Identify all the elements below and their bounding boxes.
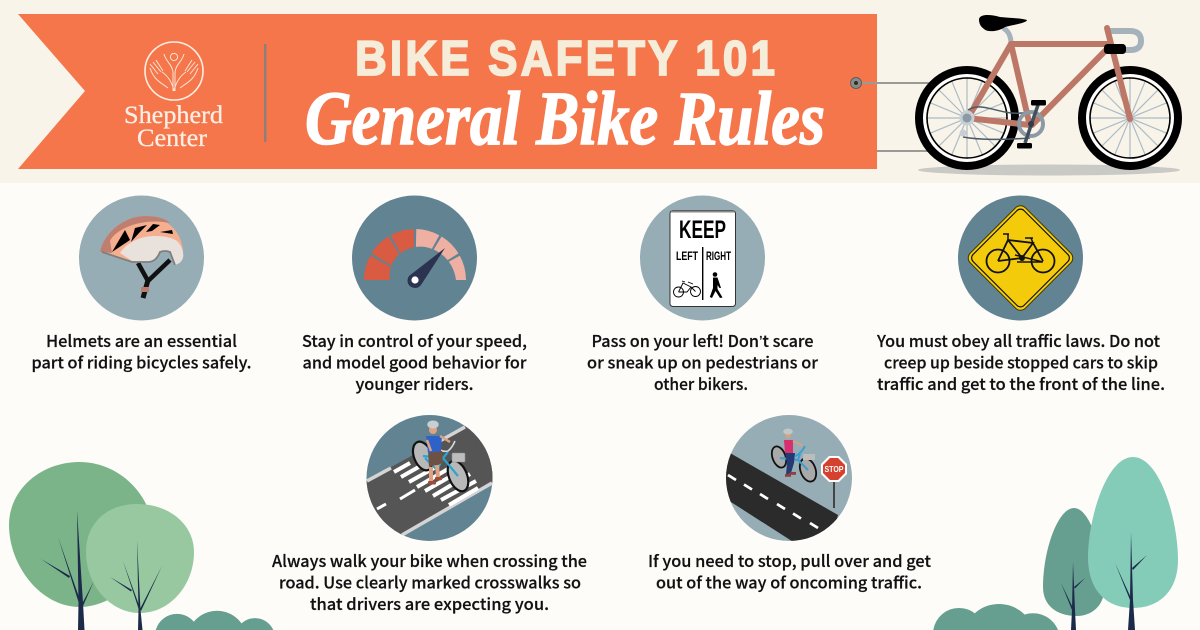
text: crosswalks: Always walk your bike when crossing the [272,548,587,572]
text: speed [302,328,527,395]
trees: right [933,457,1178,630]
panel: pull over rule [648,414,932,594]
logo: Shepherd Center: Center [137,125,208,152]
icon: keep left right sign: KEEP [679,216,726,244]
text: pass on left: other bikers. [654,371,748,395]
text: helmets [32,328,251,374]
title: General Bike Rules: General Bike Rules [305,77,825,161]
icon: bicycle warning sign [958,196,1083,320]
text: helmets: Helmets are an essential [46,328,237,352]
text: traffic laws: creep up beside stopped cars to skip [884,350,1158,374]
icon: crosswalk scene [366,415,492,541]
text: pass on left: or sneak up on pedestrians or [587,350,818,374]
title: Bike Safety 101: BIKE SAFETY 101 [355,31,775,86]
panel: speed rule [302,196,527,395]
text: pull over [648,548,932,594]
text: traffic laws: You must obey all traffic laws. Do not [876,328,1161,352]
text: speed: younger riders. [356,371,474,395]
text: crosswalks: that drivers are expecting you. [310,591,549,615]
text: speed: Stay in control of your speed, [302,328,527,352]
text: crosswalks: road. Use clearly marked crosswalks so [279,570,581,594]
text: crosswalks [272,548,587,615]
panel: header band [0,0,1200,183]
text: pull over: out of the way of oncoming traffic. [656,570,922,594]
icon: keep left right sign: LEFT [676,251,698,263]
panel: crosswalk rule [272,414,587,615]
panel: helmet rule [32,196,251,374]
trees: left [9,462,273,630]
icon: keep left right sign: RIGHT [706,251,731,263]
logo: Shepherd Center [124,42,224,152]
text: pass on left [587,328,818,395]
text: traffic laws: traffic and get to the front of the line. [877,371,1165,395]
icon: bicycle [918,15,1180,176]
text: speed: and model good behavior for [302,350,527,374]
text: traffic laws [876,328,1165,395]
banner ribbon [18,14,877,169]
logo: Shepherd Center: Shepherd [124,102,224,129]
text: helmets: part of riding bicycles safely. [32,350,251,374]
text: pull over: If you need to stop, pull over and get [648,548,932,572]
bike rack connectors [850,78,930,151]
icon: keep left right sign [640,196,765,320]
icon: speedometer [352,196,477,320]
icon: stop sign scene [720,414,853,545]
icon: stop sign scene: STOP [824,465,844,474]
icon: helmet [79,196,204,320]
panel: keep left rule [587,196,818,395]
panel: traffic laws rule [876,196,1165,395]
text: pass on left: Pass on your left! Don’t scare [592,328,814,352]
